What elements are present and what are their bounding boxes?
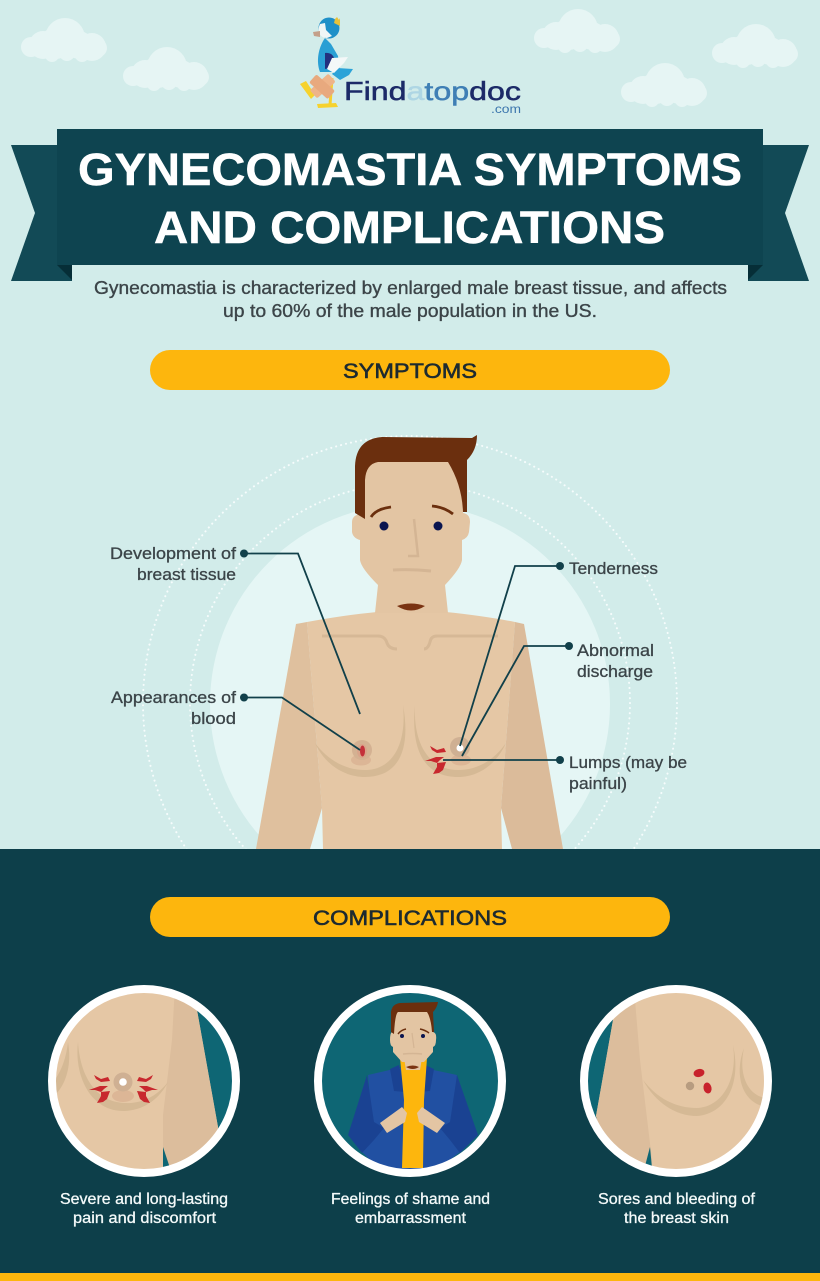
right arm	[501, 622, 563, 849]
symptoms heading pill	[150, 350, 670, 390]
hair	[355, 435, 477, 519]
ribbon left fold	[57, 265, 72, 280]
left nipple	[351, 754, 371, 766]
caption: pain: pain and discomfort	[73, 1210, 217, 1227]
label: development of breast tissue: Development of	[110, 544, 236, 563]
chin lip	[397, 604, 425, 610]
head and neck	[352, 458, 470, 613]
title: AND COMPLICATIONS	[154, 202, 665, 253]
eyebrows	[371, 506, 453, 517]
ribbon right tail	[748, 145, 809, 281]
nose	[408, 519, 418, 556]
leader: development of breast tissue	[240, 550, 360, 714]
caption: sores: the breast skin	[624, 1210, 729, 1227]
icon: breast with sores	[580, 985, 772, 1177]
label: development of breast tissue: breast tissue	[137, 565, 236, 584]
caption: sores	[598, 1191, 756, 1227]
clouds	[21, 9, 798, 107]
caption: shame	[331, 1191, 490, 1227]
leader: tenderness	[460, 562, 564, 746]
panel: shame and embarrassment	[314, 985, 506, 1227]
label: appearances of blood	[111, 688, 236, 728]
label: abnormal discharge	[577, 641, 654, 681]
intro text: up to 60% of the male population in the US.	[223, 301, 597, 321]
complications section background	[0, 849, 820, 1273]
complications heading pill	[150, 897, 670, 937]
panel: sores and bleeding	[580, 985, 772, 1227]
pain marks	[425, 746, 446, 774]
label: lumps: Lumps (may be	[569, 753, 687, 772]
title	[78, 144, 742, 253]
callout leaders	[240, 550, 573, 764]
leader: abnormal discharge	[462, 642, 573, 756]
icon: bird mascot	[300, 17, 353, 108]
mouth line	[393, 570, 431, 571]
label: lumps	[569, 753, 687, 793]
caption: pain	[60, 1191, 228, 1227]
banner ribbon	[11, 129, 809, 281]
label: abnormal discharge: Abnormal	[577, 641, 654, 660]
caption: shame: Feelings of shame and	[331, 1191, 490, 1208]
collar bones	[322, 636, 397, 649]
caption: sores: Sores and bleeding of	[598, 1191, 756, 1208]
right nipple	[451, 754, 471, 766]
label: lumps: painful)	[569, 774, 627, 793]
leader: appearances of blood	[240, 694, 360, 750]
label: appearances of blood: blood	[191, 709, 236, 728]
logo .com: .com	[491, 102, 521, 116]
label: development of breast tissue	[110, 544, 236, 584]
ribbon main	[57, 129, 763, 265]
symptoms heading pill: SYMPTOMS	[343, 359, 477, 383]
background halo circles	[142, 435, 678, 849]
ribbon right fold	[748, 265, 763, 280]
caption: pain: Severe and long-lasting	[60, 1191, 228, 1208]
left breast crescent	[315, 705, 405, 777]
right breast crescent	[414, 705, 506, 777]
caption: shame: embarrassment	[355, 1210, 467, 1227]
label: appearances of blood: Appearances of	[111, 688, 236, 707]
ribbon left tail	[11, 145, 72, 281]
label: abnormal discharge: discharge	[577, 662, 653, 681]
complications heading pill: COMPLICATIONS	[313, 906, 507, 930]
icon: man covering chest	[314, 985, 506, 1177]
panel: pain and discomfort	[48, 985, 240, 1227]
label: tenderness: Tenderness	[569, 559, 658, 578]
eyes	[380, 522, 388, 530]
leader: lumps	[443, 756, 564, 764]
logo wordmark: Find atop doc	[344, 76, 521, 106]
intro text	[94, 278, 727, 321]
icon: breast with pain marks	[48, 985, 240, 1177]
bottom stripe	[0, 1273, 820, 1281]
man illustration	[256, 435, 563, 849]
left arm	[256, 622, 322, 849]
title: GYNECOMASTIA SYMPTOMS	[78, 144, 742, 195]
intro text: Gynecomastia is characterized by enlarged male breast tissue, and affects	[94, 278, 727, 298]
logo: Findatopdoc	[300, 17, 521, 116]
torso	[307, 612, 515, 849]
